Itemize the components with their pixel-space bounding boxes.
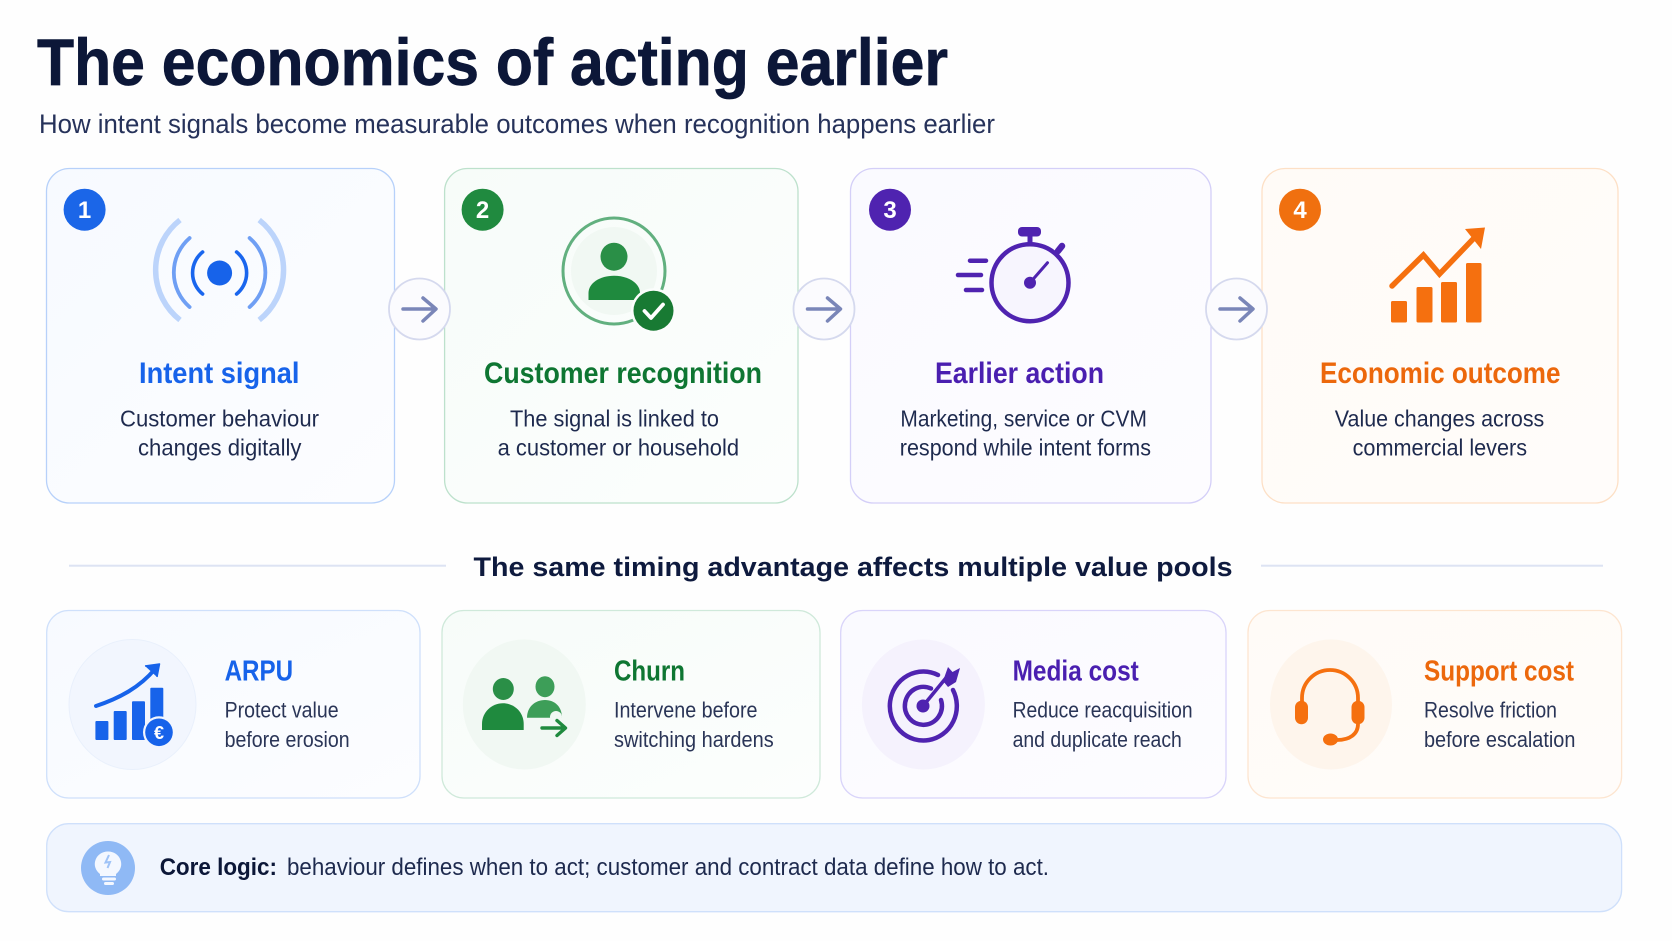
description: earlier action: respond while intent forms: [900, 434, 1151, 460]
heading: support cost: Support cost: [1424, 656, 1574, 688]
icon: light bulb: [81, 841, 135, 895]
heading: intent signal: Intent signal: [139, 357, 300, 390]
description: customer recognition: a customer or household: [498, 434, 739, 460]
icon: recognised customer: [563, 218, 676, 333]
description: earlier action: [900, 406, 1151, 460]
description: media cost: and duplicate reach: [1013, 727, 1182, 752]
heading: customer recognition: Customer recognition: [484, 357, 762, 390]
heading: economic outcome: Economic outcome: [1320, 357, 1560, 390]
badge 2: 2: [476, 197, 489, 224]
description: churn: Intervene before: [614, 698, 758, 723]
icon: signal waves: [156, 220, 284, 320]
description: media cost: Reduce reacquisition: [1013, 698, 1193, 723]
badge 1: 1: [78, 197, 91, 224]
description: economic outcome: commercial levers: [1353, 434, 1527, 460]
icon: target: [862, 640, 985, 770]
subtitle: How intent signals become measurable outcomes when recognition happens earlier: [39, 109, 995, 139]
description: customer recognition: [498, 406, 739, 460]
callout: core logic: [47, 824, 1622, 912]
arrow: step 2 to 3: [794, 278, 854, 340]
icon: headset: [1270, 640, 1392, 770]
description: economic outcome: [1335, 406, 1544, 460]
badge 3: [869, 189, 911, 231]
badge 2: [462, 189, 504, 231]
core logic statement: behaviour defines when to act; customer and contract data define how to act.: [287, 854, 1049, 881]
description: support cost: Resolve friction: [1424, 698, 1557, 723]
description: intent signal: Customer behaviour: [120, 406, 319, 432]
icon: ARPU chart with euro: €: [154, 723, 164, 743]
description: intent signal: [120, 406, 319, 460]
badge 3: 3: [883, 197, 897, 224]
panel: churn: [442, 610, 820, 798]
heading: earlier action: Earlier action: [935, 357, 1104, 390]
description: ARPU: before erosion: [225, 727, 350, 752]
heading: churn: Churn: [614, 656, 685, 688]
icon: growth chart: [1391, 228, 1485, 322]
description: churn: switching hardens: [614, 727, 774, 752]
title: The economics of acting earlier: [37, 25, 948, 99]
description: economic outcome: Value changes across: [1335, 406, 1544, 432]
panel: step 2 customer recognition: [445, 168, 798, 503]
arrow: step 3 to 4: [1206, 278, 1267, 340]
arrow: step 1 to 2: [389, 278, 450, 340]
description: support cost: before escalation: [1424, 727, 1575, 752]
description: media cost: [1013, 698, 1193, 752]
badge 4: [1279, 189, 1321, 231]
badge 1: [64, 189, 106, 231]
icon: customers leaving: [463, 640, 586, 770]
description: ARPU: Protect value: [225, 698, 339, 723]
description: support cost: [1424, 698, 1575, 752]
heading: ARPU: ARPU: [225, 656, 293, 688]
description: customer recognition: The signal is linked to: [510, 406, 719, 432]
description: ARPU: [225, 698, 350, 752]
heading: media cost: Media cost: [1013, 656, 1139, 688]
description: intent signal: changes digitally: [138, 434, 302, 460]
panel: step 1 intent signal: [46, 168, 394, 503]
panel: step 4 economic outcome: [1262, 168, 1618, 503]
section heading: The same timing advantage affects multiple value pools: [474, 552, 1232, 582]
description: churn: [614, 698, 774, 752]
core logic label: Core logic:: [160, 854, 277, 881]
icon: ARPU chart with euro: [69, 640, 196, 770]
panel: ARPU: [47, 610, 420, 798]
description: earlier action: Marketing, service or CVM: [900, 406, 1147, 432]
panel: media cost: [841, 610, 1226, 798]
panel: support cost: [1248, 610, 1622, 798]
badge 4: 4: [1293, 197, 1307, 224]
icon: stopwatch: [958, 227, 1068, 321]
panel: step 3 earlier action: [850, 168, 1211, 503]
